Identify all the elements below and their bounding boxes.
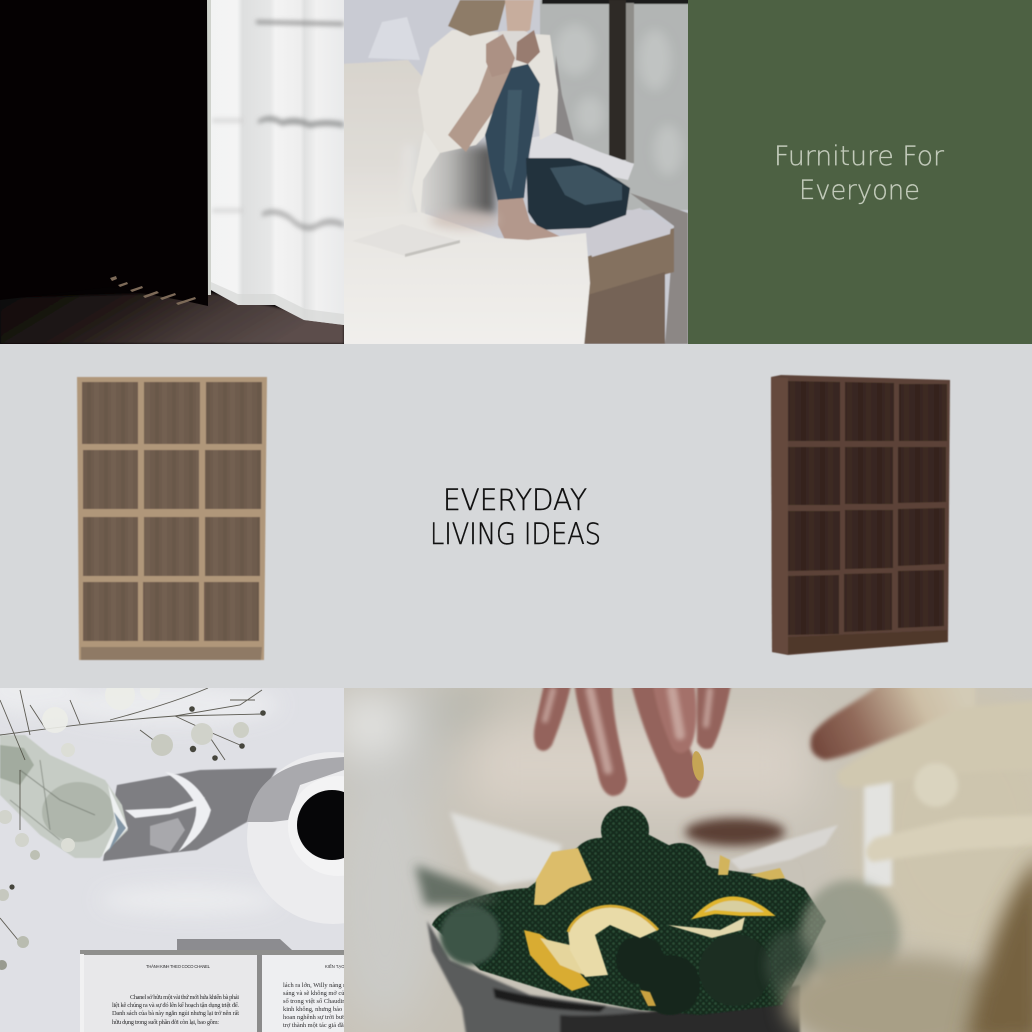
bookcase: dark walnut xyxy=(771,375,950,655)
saucer xyxy=(247,752,344,924)
white cushion xyxy=(530,133,634,180)
right page text: số trong việt số Chaudine trong xyxy=(283,998,364,1005)
heading: Furniture For Everyone: Everyone xyxy=(799,175,920,206)
greens xyxy=(432,806,826,1015)
left page text: Danh sách của bà này ngắn ngủi nhưng lại trở nên rất xyxy=(112,1010,239,1017)
blurred foreground tan xyxy=(785,955,1015,1032)
sheer curtain xyxy=(207,0,344,325)
white cloth xyxy=(450,812,562,885)
heading: Everyday Living Ideas: EVERYDAY xyxy=(443,483,587,517)
right page text: KIẾN TẠO K xyxy=(325,964,349,969)
blurred kitchen background xyxy=(344,688,1032,1032)
dark background patch xyxy=(685,818,785,846)
gypsophila blossoms xyxy=(0,680,249,970)
photo: woman on sofa with mug xyxy=(340,0,692,347)
panel: green heading block xyxy=(688,0,1032,344)
lemon drop xyxy=(690,750,706,782)
curtain light strip xyxy=(207,0,211,295)
folded jeans leg xyxy=(526,158,630,230)
seat cushion xyxy=(591,208,672,258)
gypsophila branches xyxy=(0,688,262,940)
bookcase: light oak xyxy=(77,377,267,660)
glass vase xyxy=(0,735,128,858)
grey back pillow xyxy=(554,56,574,141)
pink haze on throw xyxy=(430,211,500,229)
wall xyxy=(340,0,692,347)
right page text: kinh không, nhưng bảo hôt c xyxy=(283,1006,357,1013)
left page text: THÀNH KINH THEO COCO CHANEL xyxy=(146,964,211,969)
neck and face xyxy=(504,0,534,32)
woman shirt xyxy=(418,30,558,153)
right hand xyxy=(811,680,1032,862)
white tablecloth xyxy=(0,688,344,1032)
photo: dark curtain and sheer window drapes xyxy=(0,0,344,344)
heading: Everyday Living Ideas: LIVING IDEAS xyxy=(430,517,601,551)
blurred foreground foliage xyxy=(415,865,900,1000)
coffee xyxy=(297,790,344,860)
sofa arm xyxy=(630,193,688,344)
shelf cells xyxy=(788,381,947,635)
window view xyxy=(540,0,690,210)
right page text: lách ra lớn, Willy nàng nhiều xyxy=(283,982,358,989)
right page text xyxy=(283,964,364,1029)
hands xyxy=(486,34,515,77)
dark tan foreground edge xyxy=(965,855,1032,1032)
photo: flat lay with vase, coffee and book xyxy=(0,688,344,1032)
heading: Furniture For Everyone: Furniture For xyxy=(774,141,945,172)
book on throw xyxy=(352,224,460,256)
right page text: sáng và sẽ không mở cửa cho xyxy=(283,990,358,997)
saucer shadow xyxy=(247,757,344,822)
lemon slices xyxy=(524,848,785,1006)
book shadow xyxy=(177,939,292,950)
hair xyxy=(448,0,506,36)
left page text: hữu dụng trong suốt phần đời còn lại, bao gồm: xyxy=(112,1019,219,1026)
left page text xyxy=(112,964,239,1026)
pan xyxy=(427,921,800,1032)
coffee cup xyxy=(288,802,294,818)
white throw xyxy=(340,212,590,347)
dark drape xyxy=(0,0,208,306)
foot xyxy=(498,198,563,244)
left page text: liệt kê chúng ra và sự đó lên kế hoạch tận dụng triệt để. xyxy=(112,1002,239,1009)
finger highlights xyxy=(545,690,710,770)
light slits on floor xyxy=(110,276,196,305)
sofa base xyxy=(586,228,674,296)
base plinth xyxy=(81,647,262,660)
right page text: trợ thành một tác giả đăng xyxy=(283,1022,351,1029)
mug xyxy=(498,31,528,61)
white utensil xyxy=(730,825,838,870)
shadow under leg fading out xyxy=(405,145,495,215)
plaque xyxy=(368,17,420,60)
shirt tail xyxy=(413,132,440,212)
left hand fingers xyxy=(534,680,732,798)
forearm xyxy=(448,60,512,152)
heading: Furniture For Everyone xyxy=(774,141,945,206)
heading: Everyday Living Ideas xyxy=(430,483,601,551)
left page text: Chanel sở hữu một vài thứ mới hứa khiến bà phải xyxy=(130,994,239,1001)
photo: hands sprinkling lemon over greens in a pan xyxy=(330,680,1032,1032)
light caustic in shadow xyxy=(125,772,211,852)
vase shadow xyxy=(103,768,277,861)
shelf cells xyxy=(82,382,262,641)
right page text: hoan nghênh sự trời bước đ xyxy=(283,1014,354,1021)
open book xyxy=(80,939,364,1032)
base plinth xyxy=(788,630,947,654)
carpet floor xyxy=(0,292,344,344)
raised jeans leg xyxy=(485,64,540,202)
side panel xyxy=(771,377,788,654)
sofa back cushion xyxy=(344,60,424,222)
